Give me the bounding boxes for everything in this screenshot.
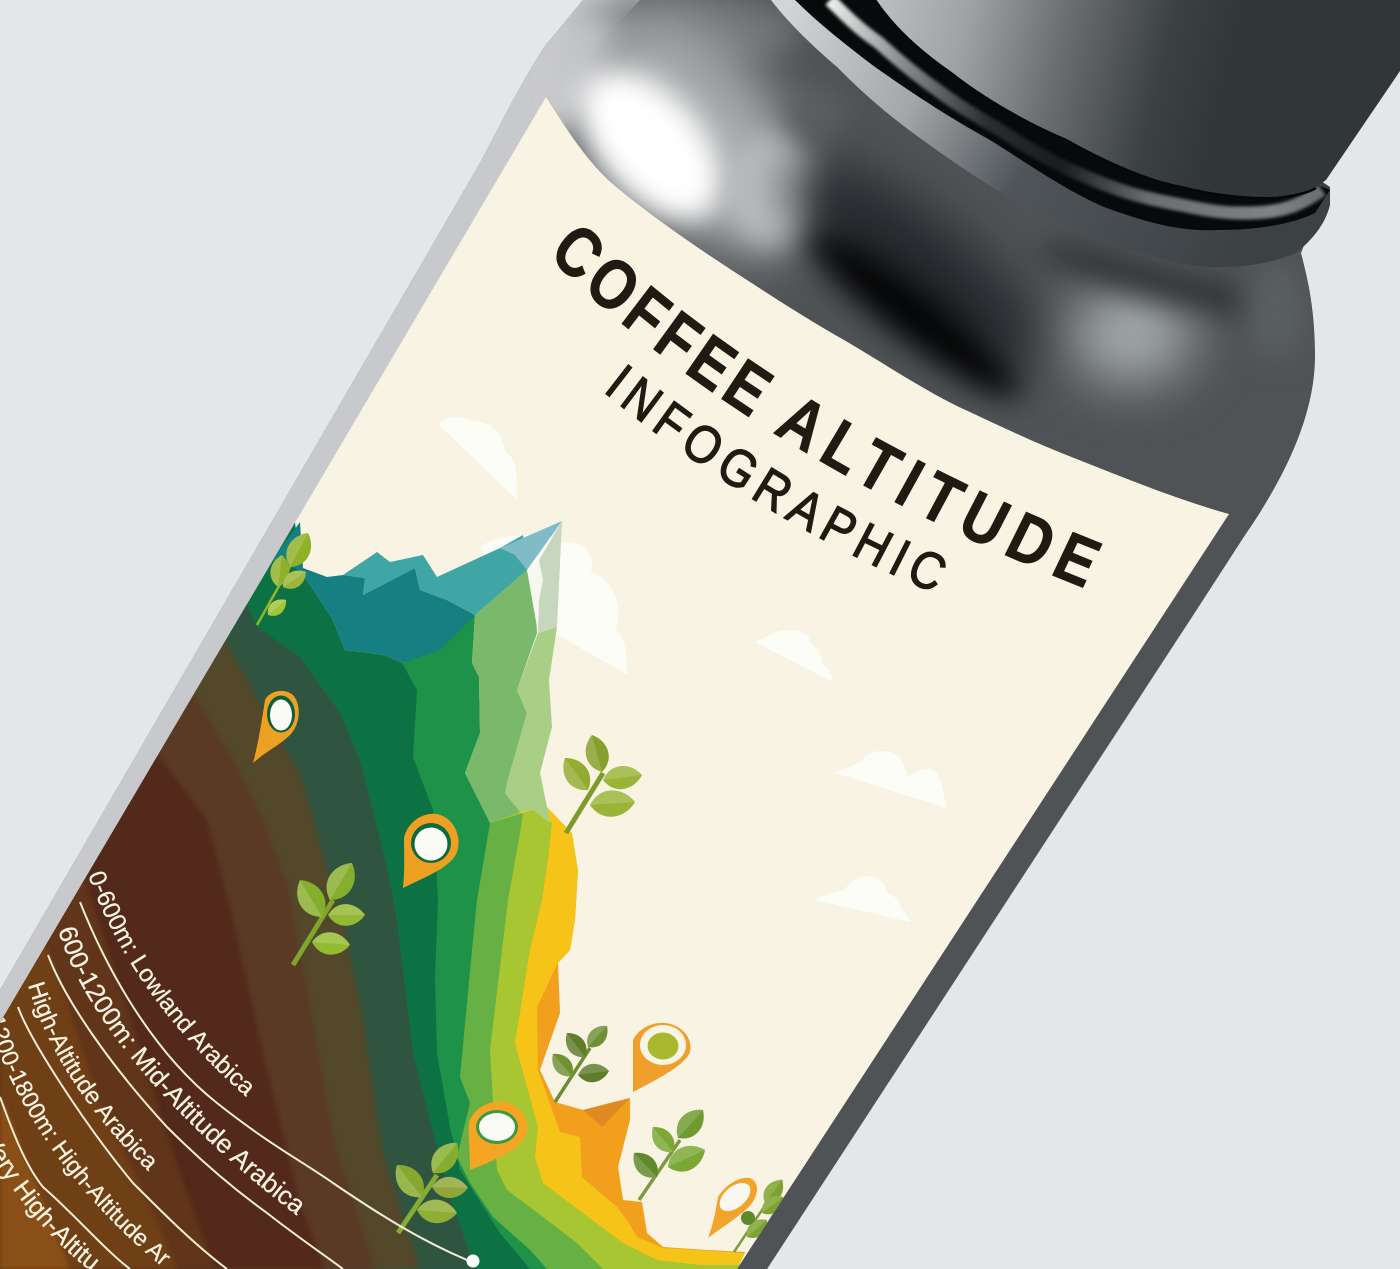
pin 1 <box>253 691 299 763</box>
altitude labels <box>0 872 302 1269</box>
lime band <box>485 810 740 1269</box>
orange shadow facet <box>583 1098 630 1127</box>
yellow band <box>117 800 745 1268</box>
sprig: label edge <box>734 1175 789 1252</box>
teal peak <box>272 522 475 663</box>
brown band <box>0 690 375 1269</box>
upper lighter facet <box>505 627 557 823</box>
cloud 1 <box>438 417 517 500</box>
olive band <box>52 640 420 1269</box>
light teal ridge <box>343 535 527 615</box>
dark grey-green band <box>0 600 475 1269</box>
sprig: centre <box>289 857 365 965</box>
pale blue summit <box>500 521 562 570</box>
cloud behind peak <box>480 535 628 675</box>
pin 4 <box>633 1023 690 1092</box>
sprig: top left <box>256 533 312 626</box>
snow facet pale <box>538 521 562 633</box>
caramel band <box>0 920 177 1269</box>
black groove <box>795 0 1330 230</box>
cap edge line <box>875 0 1316 198</box>
lower neck lip <box>771 0 1330 267</box>
leader dot <box>466 1254 480 1268</box>
bottle cap <box>875 0 1400 198</box>
title: COFFEE ALTITUDE <box>556 228 1103 588</box>
cloud 5 <box>815 877 910 922</box>
sprig: valley 1 <box>547 1020 613 1102</box>
amber band <box>0 1093 70 1269</box>
label paper <box>247 97 1229 1269</box>
dark green band <box>0 522 530 1269</box>
dark brown band <box>0 745 325 1269</box>
mid green band <box>0 615 547 1269</box>
cloud 4 <box>835 751 947 808</box>
altitude label 1: 0-600m: Lowland Arabica <box>90 872 252 1097</box>
mountain altitude bands <box>0 521 745 1269</box>
sprig: cliff <box>563 735 642 834</box>
upper pale green facet <box>465 570 537 823</box>
pin 2 <box>403 814 459 888</box>
clouds <box>438 417 947 922</box>
warm brown band <box>0 880 215 1269</box>
light green band <box>457 813 603 1269</box>
pin 5 <box>708 1177 757 1238</box>
altitude label 2: 600-1200m: Mid-Altitude Arabica <box>60 927 302 1216</box>
snow facet white <box>527 570 538 632</box>
altitude label 3: High-Altitude Arabica <box>28 982 155 1172</box>
cloud 3 <box>755 630 833 682</box>
sprig: lower green <box>388 1136 468 1233</box>
subtitle: INFOGRAPHIC <box>605 364 946 590</box>
leader lines <box>0 902 467 1269</box>
neck ring highlight <box>830 0 1322 213</box>
orange band <box>537 863 745 1264</box>
sprig: valley 2 <box>627 1103 711 1200</box>
pin 3 <box>469 1102 527 1170</box>
